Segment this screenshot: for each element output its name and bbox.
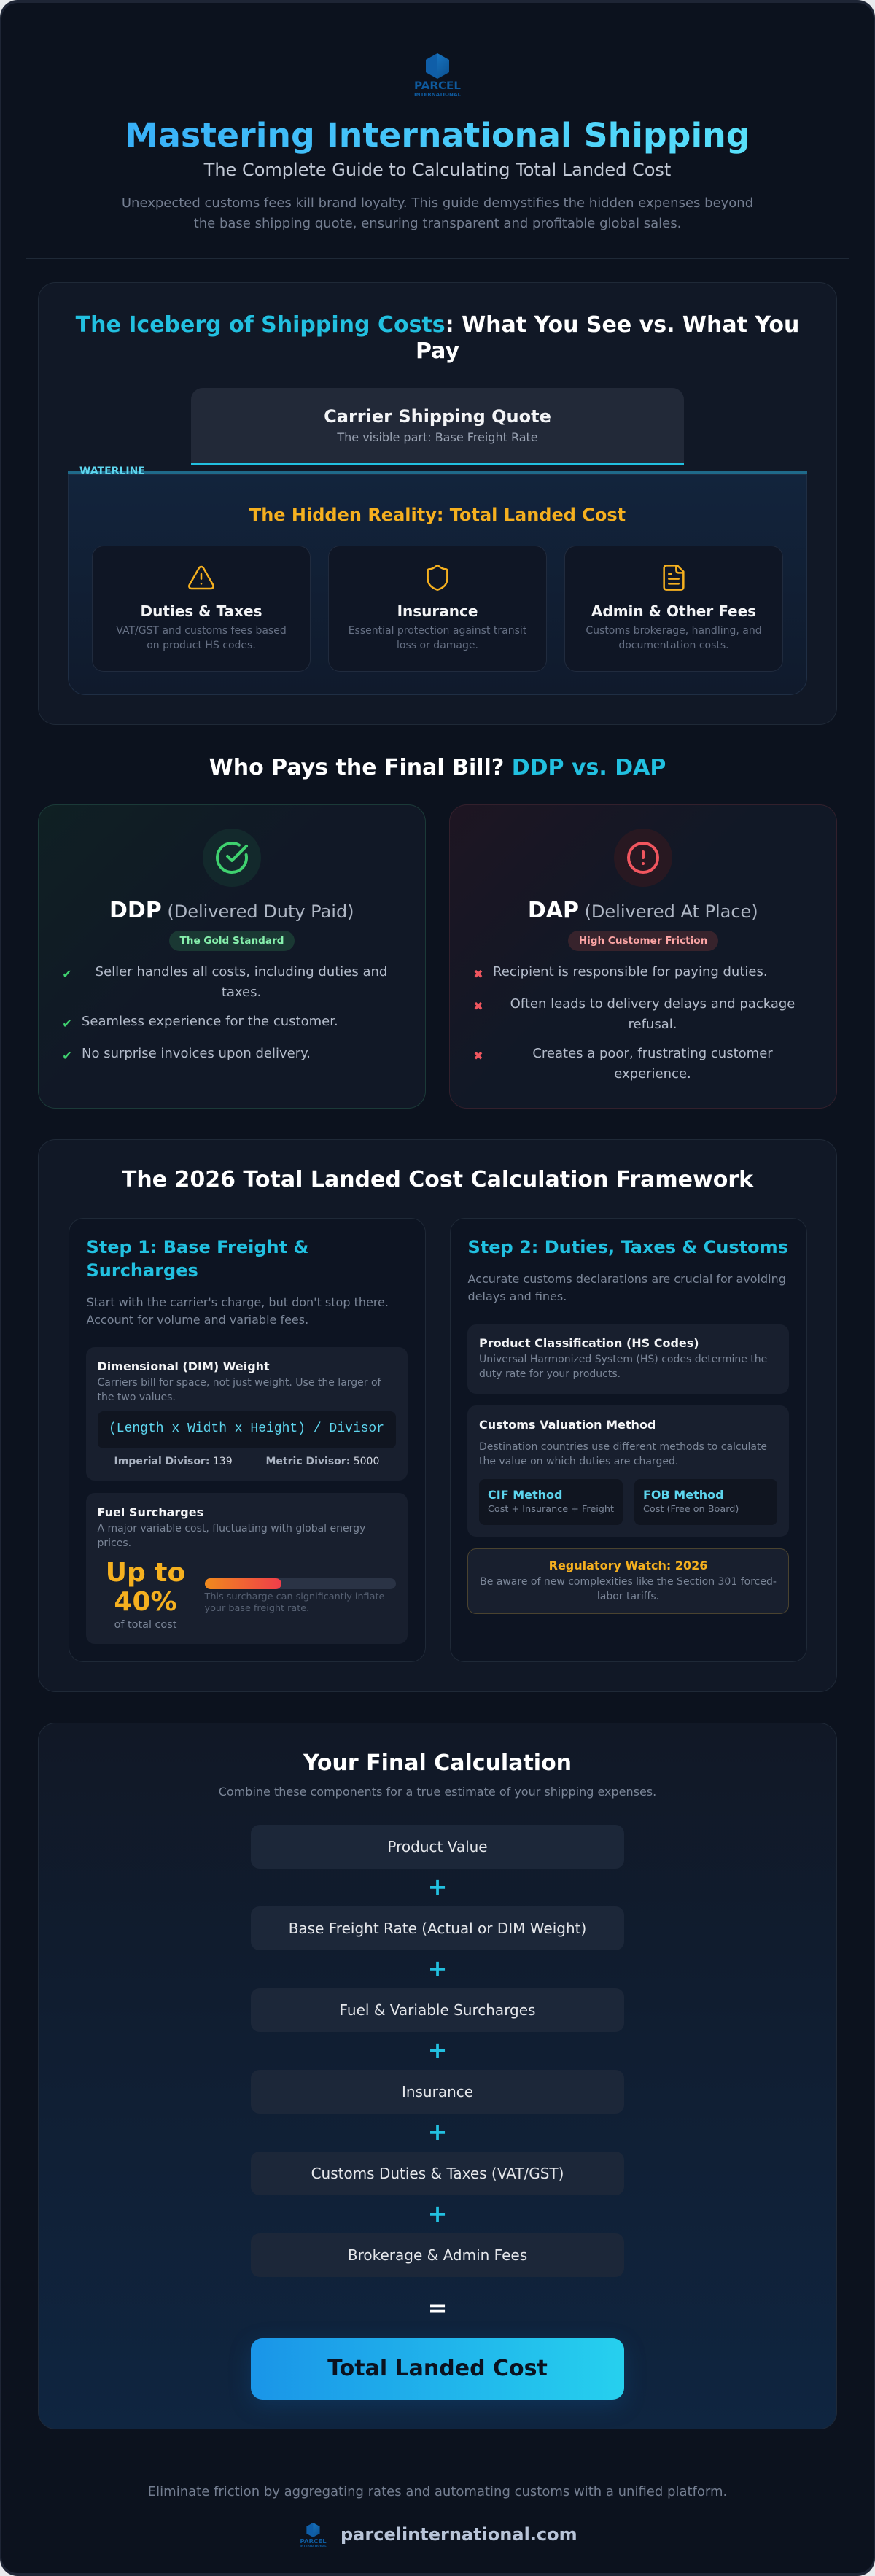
HS text: duty rate for your products. [479,1368,621,1380]
equals: = [428,2294,447,2321]
DAP badge: High Customer Friction [579,935,707,947]
step 2 text: Accurate customs declarations are crucial for avoiding [468,1272,786,1286]
check mark: ✔ [62,1017,72,1031]
insurance text [349,625,526,651]
CIF box [479,1479,623,1525]
DIM formula [98,1411,395,1448]
fuel surcharge box [86,1493,407,1644]
plus: + [428,2036,447,2064]
icon: alert circle [614,829,672,887]
iceberg heading: The Iceberg of Shipping Costs: What You See vs. What You [76,312,799,338]
footer text: Eliminate friction by aggregating rates and automating customs with a unified platform. [148,2484,727,2499]
hidden costs box [68,471,807,695]
valuation text: Destination countries use different methods to calculate [479,1441,767,1453]
item: brokerage [251,2233,624,2277]
panel: final calculation [38,1723,837,2429]
insurance text: Essential protection against transit [349,625,526,637]
footer logo: PARCEL [300,2538,327,2545]
admin title: Admin & Other Fees [591,602,756,620]
final subtitle: Combine these components for a true estimate of your shipping expenses. [219,1785,656,1799]
item: insurance: Insurance [402,2083,473,2100]
valuation text [479,1441,767,1467]
step 2 card [449,1218,806,1662]
item: product value: Product Value [387,1838,488,1855]
step 2 title: Step 2: Duties, Taxes & Customs [468,1237,788,1257]
step 1 title [86,1237,308,1281]
icon: check circle [203,829,261,887]
FOB title: FOB Method [643,1488,724,1502]
admin text: documentation costs. [618,640,729,651]
intro text [122,195,753,231]
card: insurance [328,546,547,672]
drawback 1: Recipient is responsible for paying duties. [493,964,768,979]
regulatory title: Regulatory Watch: 2026 [549,1559,707,1572]
FOB text: Cost (Free on Board) [643,1504,739,1515]
FOB box [634,1479,777,1525]
CIF text: Cost + Insurance + Freight [488,1504,614,1515]
DIM text: the two values. [98,1392,176,1403]
card: duties [92,546,311,672]
step 1 title: Step 1: Base Freight & [86,1237,308,1257]
benefit 1 [96,964,387,1000]
HS title: Product Classification (HS Codes) [479,1336,699,1350]
card: admin fees [564,546,783,672]
logo: PARCEL [414,80,461,92]
regulatory callout [467,1548,789,1613]
carrier subtitle: The visible part: Base Freight Rate [337,430,538,444]
fuel text: A major variable cost, fluctuating with global energy [98,1523,365,1535]
fuel stat [106,1558,185,1617]
insurance text: loss or damage. [397,640,478,651]
DAP list [473,964,795,1082]
fuel stat: Up to [106,1558,185,1588]
DAP title: DAP (Delivered At Place) [528,898,758,923]
fuel bar [204,1578,395,1589]
valuation title: Customs Valuation Method [479,1418,656,1432]
step 2 text: delays and fines. [468,1289,567,1303]
plus: + [428,1955,447,1982]
HS text: Universal Harmonized System (HS) codes determine the [479,1354,767,1365]
item: product value [251,1825,624,1869]
icon: document [663,565,685,591]
waterline label: WATERLINE [79,465,145,477]
item: brokerage: Brokerage & Admin Fees [348,2246,527,2264]
duties text: on product HS codes. [147,640,256,651]
step 1 text: Start with the carrier's charge, but don't stop there. [86,1295,389,1309]
DDP list [62,964,387,1063]
benefit 1: Seller handles all costs, including duties and [96,964,387,979]
regulatory text: labor tariffs. [597,1591,659,1602]
drawback 3 [532,1046,773,1082]
fuel stat: 40% [114,1587,177,1617]
step 1 title: Surcharges [86,1260,198,1281]
item: duties: Customs Duties & Taxes (VAT/GST) [311,2165,564,2182]
hidden title: The Hidden Reality: Total Landed Cost [249,505,626,525]
DAP badge [568,931,718,951]
item: surcharges: Fuel & Variable Surcharges [340,2001,535,2019]
panel: framework [38,1139,837,1692]
fuel bar note: This surcharge can significantly inflate [204,1591,384,1602]
DIM weight box [86,1347,407,1481]
step 2 text [468,1272,786,1303]
x mark: ✖ [473,967,483,981]
metric divisor: Metric Divisor: 5000 [265,1456,379,1467]
x mark: ✖ [473,999,483,1013]
HS text [479,1354,767,1380]
HS codes box [467,1324,789,1394]
step 1 card [69,1218,426,1662]
drawback 2: refusal. [629,1017,677,1032]
drawback 2: Often leads to delivery delays and package [510,996,795,1012]
item: base freight: Base Freight Rate (Actual or DIM Weight) [289,1920,586,1937]
fuel bar note: your base freight rate. [204,1603,309,1614]
panel: iceberg [38,282,837,725]
valuation text: the value on which duties are charged. [479,1456,678,1467]
panel: DAP [449,804,837,1109]
final heading: Your Final Calculation [303,1750,572,1776]
panel: DDP [38,804,426,1109]
benefit 2: Seamless experience for the customer. [82,1014,338,1029]
item: insurance [251,2070,624,2114]
x mark: ✖ [473,1049,483,1063]
carrier quote box [191,388,684,465]
plus: + [428,1873,447,1901]
DDP title: DDP (Delivered Duty Paid) [109,898,354,923]
logo [414,53,461,97]
DIM text [98,1377,381,1403]
DDP badge: The Gold Standard [179,935,284,947]
drawback 3: experience. [614,1066,691,1082]
check mark: ✔ [62,967,72,981]
subtitle: The Complete Guide to Calculating Total Landed Cost [204,160,671,180]
carrier title: Carrier Shipping Quote [324,406,551,427]
drawback 2 [510,996,795,1032]
framework heading: The 2026 Total Landed Cost Calculation Framework [122,1167,753,1192]
step 1 text: Account for volume and variable fees. [86,1313,308,1327]
check mark: ✔ [62,1049,72,1063]
step 1 text [86,1295,389,1327]
footer logo [300,2523,327,2548]
intro text: the base shipping quote, ensuring transparent and profitable global sales. [194,216,681,231]
icon: shield [427,565,448,591]
duties title: Duties & Taxes [140,602,262,620]
admin text: Customs brokerage, handling, and [586,625,762,637]
insurance title: Insurance [397,602,478,620]
drawback 3: Creates a poor, frustrating customer [532,1046,773,1061]
plus: + [428,2200,447,2227]
DDP vs DAP heading: Who Pays the Final Bill? DDP vs. DAP [209,755,666,780]
imperial divisor: Imperial Divisor: 139 [114,1456,233,1467]
fuel bar note [204,1591,384,1614]
DIM formula: (Length x Width x Height) / Divisor [109,1421,384,1436]
DIM text: Carriers bill for space, not just weight. Use the larger of [98,1377,381,1389]
regulatory text [480,1576,777,1602]
footer URL: parcelinternational.com [341,2524,578,2545]
iceberg heading [76,312,799,364]
iceberg heading: Pay [416,338,459,364]
fuel text: prices. [98,1537,131,1549]
duties text: VAT/GST and customs fees based [116,625,287,637]
benefit 1: taxes. [222,985,261,1000]
DDP badge [169,931,295,951]
title: Mastering International Shipping [125,115,750,155]
CIF title: CIF Method [488,1488,562,1502]
DIM title: Dimensional (DIM) Weight [98,1359,270,1373]
fuel title: Fuel Surcharges [98,1505,203,1519]
fuel stat caption: of total cost [114,1619,176,1631]
benefit 3: No surprise invoices upon delivery. [82,1046,311,1061]
icon: warning [188,566,214,589]
item: duties [251,2152,624,2195]
duties text [116,625,287,651]
admin text [586,625,762,651]
regulatory text: Be aware of new complexities like the Section 301 forced- [480,1576,777,1588]
item: surcharges [251,1988,624,2032]
total box: Total Landed Cost [327,2356,548,2381]
valuation box [467,1405,789,1537]
item: base freight [251,1906,624,1950]
fuel text [98,1523,365,1549]
plus: + [428,2118,447,2146]
intro text: Unexpected customs fees kill brand loyalty. This guide demystifies the hidden expenses beyond [122,195,753,211]
total box [251,2338,624,2400]
